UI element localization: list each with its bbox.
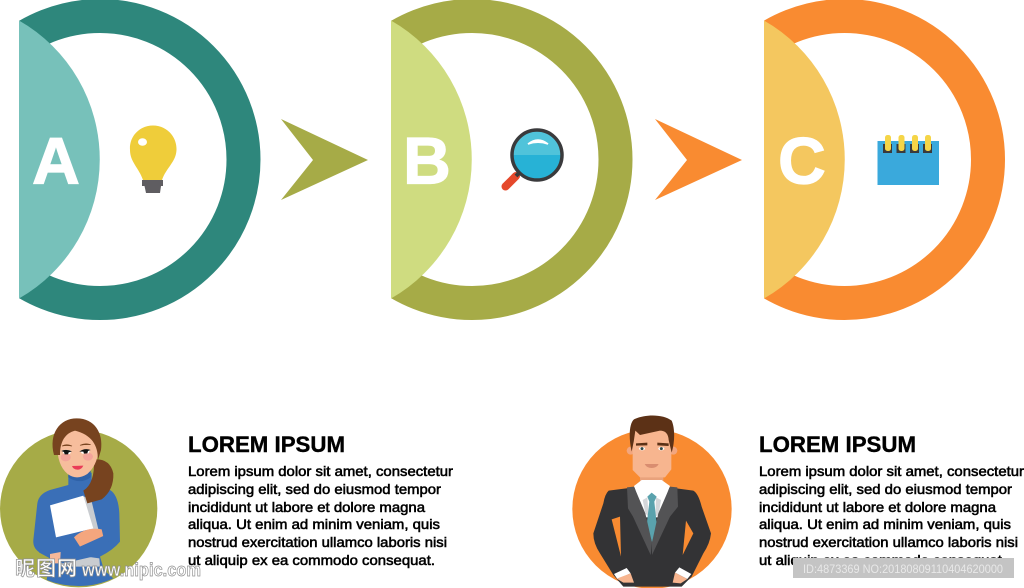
watermark: id bar [793,558,1014,578]
letter C: C [778,124,826,198]
icon: magnifier [506,130,562,186]
body text [188,463,453,568]
letter B: B [403,124,451,198]
body text: nostrud exercitation ullamco laboris nisi [759,534,1018,550]
watermark: nipic [15,552,201,581]
body text: Lorem ipsum dolor sit amet, consectetur [188,463,453,479]
body text: nostrud exercitation ullamco laboris nisi [188,534,447,550]
heading: LOREM IPSUM [759,432,916,457]
body text: Lorem ipsum dolor sit amet, consectetur [759,463,1024,479]
watermark: nipic: 昵图网 [15,552,77,581]
body text: adipiscing elit, sed do eiusmod tempor [188,481,441,497]
figure: woman with folder [0,418,157,587]
ring B [328,16,616,303]
panel: step A [0,16,244,303]
heading: LOREM IPSUM [188,432,345,457]
body text: incididunt ut labore et dolore magna [188,499,425,515]
body text: ut aliquip ex ea commodo consequat. [759,552,1006,568]
panel: step C [701,16,988,303]
body text [759,463,1024,568]
letter A: A [32,124,80,198]
watermark: id bar: ID:4873369 NO:20180809110404620000 [803,562,1003,576]
lens C [764,20,845,298]
body text: ut aliquip ex ea commodo consequat. [188,552,435,568]
text block: left [188,432,453,568]
icon: light bulb [130,126,177,193]
arrow: olive [281,119,368,200]
icon: notepad [878,135,939,185]
body text: incididunt ut labore et dolore magna [759,499,996,515]
ring A [0,16,244,303]
ring C [701,16,988,303]
figure: man in suit [572,415,732,588]
lens B [391,20,472,298]
text block: right [759,432,1024,568]
body text: aliqua. Ut enim ad minim veniam, quis [188,516,440,532]
watermark: nipic: www.nipic.com [81,560,201,580]
body text: aliqua. Ut enim ad minim veniam, quis [759,516,1011,532]
panel: step B [328,16,616,303]
arrow: orange [655,119,742,200]
lens A [19,20,100,298]
body text: adipiscing elit, sed do eiusmod tempor [759,481,1012,497]
